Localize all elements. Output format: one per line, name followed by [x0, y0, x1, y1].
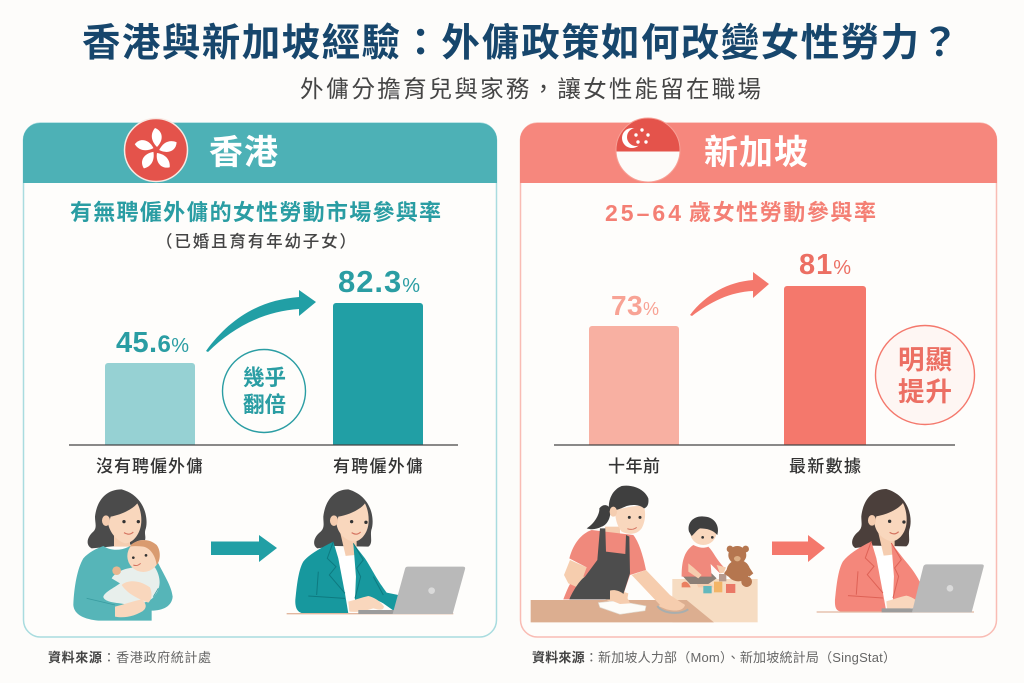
chart heading: Singapore: 25–64 — [605, 200, 681, 226]
illustration: working woman with laptop — [817, 489, 984, 612]
callout: clear increase: 明顯 — [898, 345, 952, 375]
panel header: Hong Kong — [23, 123, 497, 183]
panel name: Singapore: 新加坡 — [704, 134, 808, 172]
chart heading: Hong Kong: 有無聘僱外傭的女性勞動市場參與率 — [70, 200, 441, 225]
value: 82.3%: 82.3% — [338, 264, 420, 299]
bar chart: Hong Kong — [69, 264, 458, 476]
bar: with helper — [333, 303, 423, 445]
axis label: latest data: 最新數據 — [789, 457, 861, 476]
callout: clear increase — [876, 326, 974, 424]
bar: ten years ago — [589, 326, 679, 445]
panel: Singapore — [520, 118, 997, 637]
axis label: ten years ago: 十年前 — [608, 457, 660, 476]
subtitle: 外傭分擔育兒與家務，讓女性能留在職場 — [300, 76, 761, 102]
title: 香港與新加坡經驗：外傭政策如何改變女性勞力？ — [82, 22, 959, 65]
chart heading: Singapore: 歲女性勞動參與率 — [689, 200, 876, 225]
illustration: working woman with laptop — [287, 489, 465, 614]
value: 73%: 73% — [611, 290, 659, 321]
callout: nearly doubled: 幾乎 — [243, 366, 286, 390]
bar: latest data — [784, 286, 866, 445]
chart heading: Singapore — [605, 200, 876, 226]
value: 45.6%: 45.6% — [116, 327, 189, 359]
panel: Hong Kong — [23, 118, 497, 637]
axis label: with helper: 有聘僱外傭 — [333, 457, 423, 476]
callout: nearly doubled: 翻倍 — [243, 392, 286, 417]
callout: clear increase: 提升 — [898, 377, 952, 407]
bar: without helper — [105, 363, 195, 445]
illustration: mother holding baby — [73, 489, 173, 621]
callout: nearly doubled — [222, 350, 306, 432]
bar chart: Singapore — [554, 249, 974, 476]
chart subheading: Hong Kong: （已婚且育有年幼子女） — [156, 231, 356, 251]
icon: Hong Kong flag — [124, 118, 188, 182]
source: Singapore: 資料來源：新加坡人力部（Mom）、新加坡統計局（SingStat） — [532, 650, 896, 665]
icon: Singapore flag — [616, 118, 680, 182]
source: Hong Kong: 資料來源：香港政府統計處 — [48, 650, 211, 665]
panel header: Singapore — [520, 123, 997, 183]
arrow: upward trend — [206, 290, 316, 352]
panel name: Hong Kong: 香港 — [209, 134, 278, 172]
axis label: without helper: 沒有聘僱外傭 — [96, 457, 203, 476]
value: 81%: 81% — [799, 249, 851, 281]
arrow: mother to working — [211, 535, 277, 562]
illustration: woman cleaning beside playing child — [531, 486, 758, 622]
arrow: upward trend — [690, 272, 769, 316]
arrow: caregiver to working — [772, 535, 825, 562]
